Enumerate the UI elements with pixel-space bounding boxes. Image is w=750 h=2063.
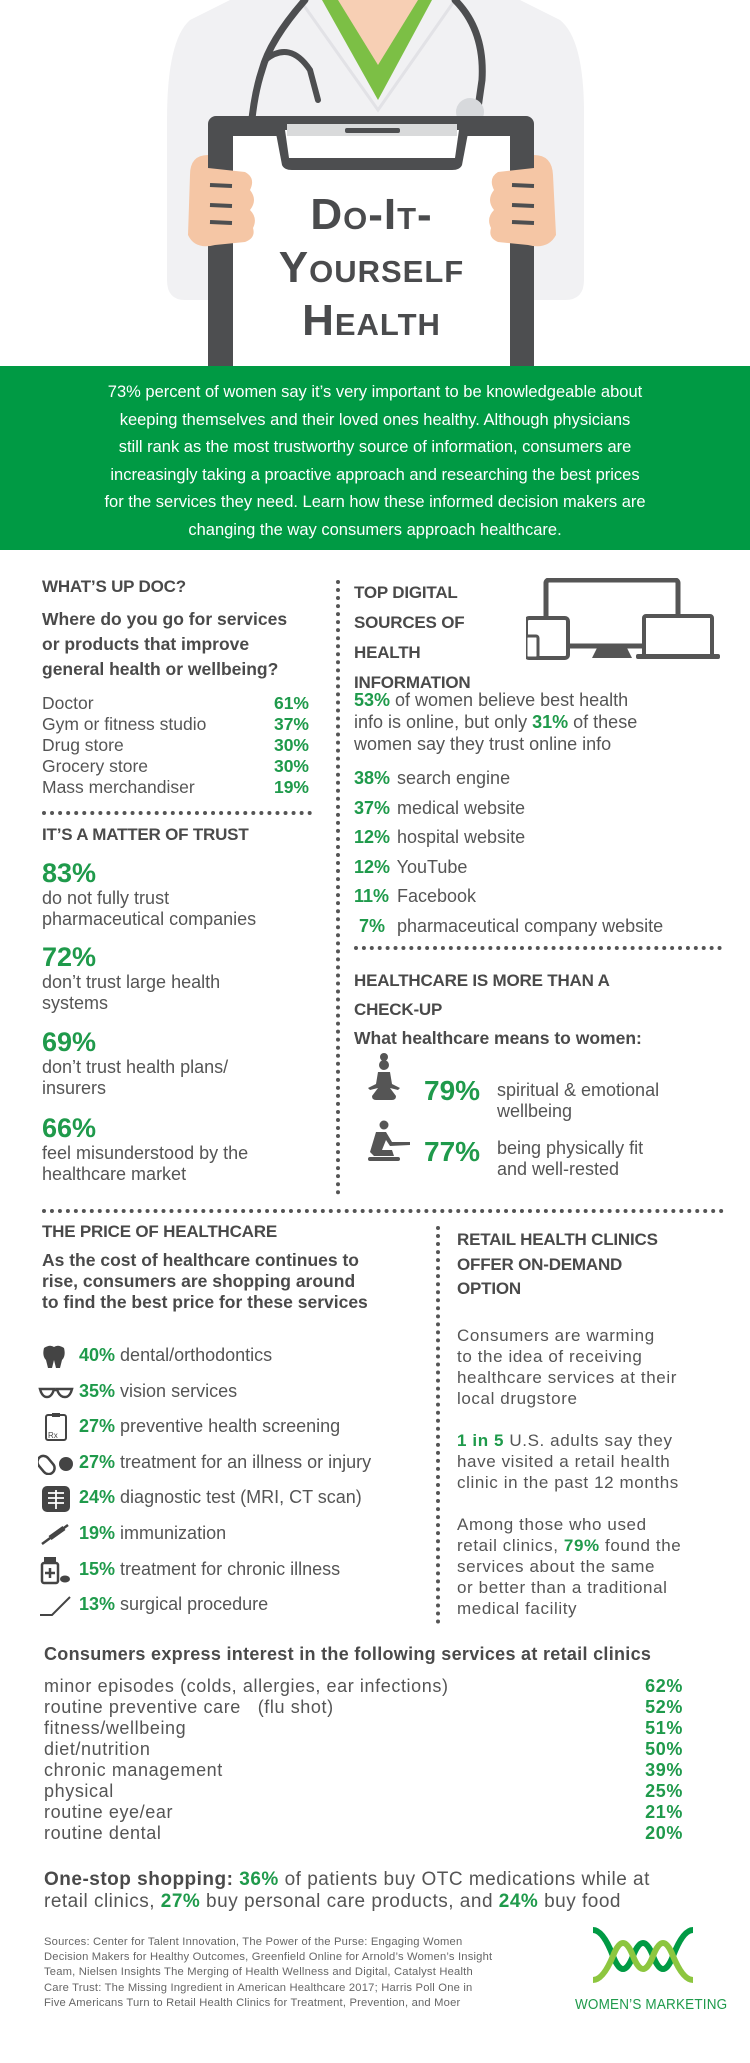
- list: 25%: [645, 1781, 683, 1801]
- heading: CHECK-UP: [354, 1000, 442, 1019]
- list: 30%: [274, 756, 309, 776]
- text block: Consumers are warming: [457, 1326, 655, 1345]
- heading: Consumers express interest in the following services at retail clinics: [44, 1644, 651, 1664]
- question: [42, 609, 287, 679]
- subheading: [42, 1250, 368, 1312]
- text block: to the idea of receiving: [457, 1347, 642, 1366]
- sources: Sources: Center for Talent Innovation, The Power of the Purse: Engaging Women: [44, 1936, 462, 1948]
- one-stop shopping callout: retail clinics, 27% buy personal care products, and 24% buy food: [44, 1891, 621, 1912]
- left hand: [188, 155, 255, 246]
- stat 69: 69%: [42, 1027, 96, 1057]
- heading: OPTION: [457, 1279, 521, 1298]
- list: 38%: [354, 768, 390, 788]
- list: 37%: [274, 714, 309, 734]
- stat 72: 72%: [42, 942, 96, 972]
- list: YouTube: [397, 856, 467, 876]
- title: [279, 190, 464, 345]
- stat paragraph: women say they trust online info: [354, 734, 611, 754]
- heading: IT’S A MATTER OF TRUST: [42, 825, 249, 844]
- section: price of healthcare: [38, 1222, 372, 1616]
- coat: [167, 0, 584, 300]
- list: minor episodes (colds, allergies, ear infections): [44, 1676, 449, 1696]
- stat 79: services about the same: [457, 1557, 655, 1576]
- list: pharmaceutical company website: [397, 916, 663, 936]
- list: routine eye/ear: [44, 1802, 173, 1822]
- list: Facebook: [397, 886, 476, 906]
- section: more than a check-up: spiritual & emotional: [497, 1080, 659, 1100]
- stat 1 in 5: [457, 1431, 679, 1492]
- heading: TOP DIGITAL: [354, 583, 458, 602]
- price list with icons: [38, 1345, 372, 1616]
- stat paragraph: info is online, but only 31% of these: [354, 712, 637, 732]
- section: interest in services: [44, 1644, 683, 1843]
- stethoscope: [250, 0, 305, 145]
- header illustration: doctor holding clipboard: [167, 0, 584, 366]
- intro green band: changing the way consumers approach healthcare.: [188, 520, 562, 538]
- stat 66: healthcare market: [42, 1164, 186, 1184]
- section: more than a check-up: [354, 971, 659, 1179]
- section: retail health clinics: [457, 1230, 681, 1618]
- stat paragraph: 53% of women believe best health: [354, 690, 628, 710]
- intro green band: keeping themselves and their loved ones healthy. Although physicians: [120, 410, 630, 428]
- list: [354, 768, 663, 936]
- one-stop shopping callout: [44, 1869, 650, 1912]
- stat 83: [42, 858, 256, 929]
- stat 69: [42, 1027, 228, 1098]
- question: Where do you go for services: [42, 609, 287, 629]
- list: 39%: [645, 1760, 683, 1780]
- list: medical website: [397, 798, 525, 818]
- price list with icons: 40% dental/orthodontics: [79, 1345, 272, 1365]
- list: routine preventive care (flu shot): [44, 1697, 334, 1717]
- question: general health or wellbeing?: [42, 659, 278, 679]
- list: Doctor: [42, 693, 94, 713]
- stat 79: or better than a traditional: [457, 1578, 668, 1597]
- text block: local drugstore: [457, 1389, 578, 1408]
- heading: SOURCES OF: [354, 613, 464, 632]
- title: Do-It-: [310, 190, 433, 239]
- stat 72: [42, 942, 220, 1013]
- subheading: As the cost of healthcare continues to: [42, 1250, 359, 1270]
- intro green band: for the services they need. Learn how these informed decision makers are: [104, 493, 646, 511]
- stat 69: don’t trust health plans/: [42, 1057, 228, 1077]
- list: 7%: [359, 916, 385, 936]
- heading: RETAIL HEALTH CLINICS: [457, 1230, 658, 1249]
- stat 83: pharmaceutical companies: [42, 909, 256, 929]
- list: hospital website: [397, 827, 525, 847]
- stat 66: 66%: [42, 1113, 96, 1143]
- intro green band: 73% percent of women say it’s very important to be knowledgeable about: [108, 383, 642, 401]
- heading: WHAT’S UP DOC?: [42, 577, 186, 596]
- stat 1 in 5: 1 in 5 U.S. adults say they: [457, 1431, 673, 1450]
- list: diet/nutrition: [44, 1739, 150, 1759]
- stat 66: feel misunderstood by the: [42, 1143, 248, 1163]
- list: 20%: [645, 1823, 683, 1843]
- list: search engine: [397, 768, 510, 788]
- list: [42, 693, 309, 797]
- stat paragraph: [354, 690, 637, 754]
- list: chronic management: [44, 1760, 223, 1780]
- list: routine dental: [44, 1823, 161, 1843]
- stat 1 in 5: clinic in the past 12 months: [457, 1473, 679, 1492]
- price list with icons: 24% diagnostic test (MRI, CT scan): [79, 1487, 362, 1507]
- list: 21%: [645, 1802, 683, 1822]
- sources: Decision Makers for Healthy Outcomes, Greenfield Online for Arnold’s Women’s Insight: [44, 1951, 492, 1963]
- section: what's up doc: [42, 577, 309, 797]
- stat 79: 79%: [424, 1075, 480, 1106]
- subheading: to find the best price for these services: [42, 1292, 368, 1312]
- logo: women's marketing: [575, 1927, 727, 2013]
- list: Grocery store: [42, 756, 148, 776]
- sources: [44, 1936, 492, 2009]
- section: more than a check-up: wellbeing: [497, 1101, 572, 1121]
- list: [44, 1676, 683, 1843]
- list: 11%: [354, 886, 389, 906]
- question: or products that improve: [42, 634, 249, 654]
- stat 72: don’t trust large health: [42, 972, 220, 992]
- title: Health: [302, 296, 441, 345]
- list: Drug store: [42, 735, 124, 755]
- one-stop shopping callout: One-stop shopping: 36% of patients buy OTC medications while at: [44, 1869, 650, 1890]
- price list with icons: 35% vision services: [79, 1381, 237, 1401]
- intro green band: increasingly taking a proactive approach and researching the best prices: [110, 466, 640, 484]
- clipboard board: [208, 116, 534, 396]
- icon: meditation: [368, 1053, 400, 1100]
- sources: Team, Nielsen Insights The Merging of Health Wellness and Digital, Catalyst Health: [44, 1966, 473, 1978]
- stat 79: Among those who used: [457, 1515, 647, 1534]
- list: Gym or fitness studio: [42, 714, 206, 734]
- stat 66: [42, 1113, 248, 1184]
- intro green band: [0, 366, 750, 550]
- price list with icons: 27% preventive health screening: [79, 1416, 340, 1436]
- heading: THE PRICE OF HEALTHCARE: [42, 1222, 277, 1241]
- list: 12%: [354, 856, 390, 876]
- heading: OFFER ON-DEMAND: [457, 1254, 622, 1274]
- price list with icons: Rx: [48, 1431, 58, 1440]
- right hand: [489, 155, 556, 246]
- sources: Five Americans Turn to Retail Health Clinics for Treatment, Prevention, and Moer: [44, 1997, 460, 2009]
- stat 1 in 5: have visited a retail health: [457, 1452, 670, 1471]
- sources: Care Trust: The Missing Ingredient in American Healthcare 2017; Harris Poll One in: [44, 1982, 472, 1994]
- list: 37%: [354, 798, 390, 818]
- logo: women's marketing: WOMEN’S MARKETING: [575, 1996, 727, 2013]
- icon: devices: [526, 578, 720, 660]
- text block: [457, 1326, 677, 1408]
- list: 50%: [645, 1739, 683, 1759]
- stat 69: insurers: [42, 1078, 106, 1098]
- stat 83: 83%: [42, 858, 96, 888]
- list: 12%: [354, 827, 390, 847]
- list: 51%: [645, 1718, 683, 1738]
- section: top digital sources: [354, 578, 720, 936]
- heading: HEALTHCARE IS MORE THAN A: [354, 971, 610, 990]
- stat 77: 77%: [424, 1136, 480, 1167]
- section: more than a check-up: and well-rested: [497, 1159, 619, 1179]
- stat 79: [457, 1515, 681, 1618]
- stat 72: systems: [42, 993, 108, 1013]
- stat 79: medical facility: [457, 1599, 577, 1618]
- price list with icons: 27% treatment for an illness or injury: [79, 1452, 371, 1472]
- price list with icons: 15% treatment for chronic illness: [79, 1559, 340, 1579]
- intro green band: still rank as the most trustworthy source of information, consumers are: [119, 438, 631, 456]
- heading: INFORMATION: [354, 673, 470, 692]
- title: Yourself: [279, 243, 464, 292]
- list: 61%: [274, 693, 309, 713]
- heading: [354, 971, 610, 1019]
- subheading: What healthcare means to women:: [354, 1028, 642, 1048]
- green scrubs V: [322, 0, 432, 100]
- stat 83: do not fully trust: [42, 888, 169, 908]
- text block: healthcare services at their: [457, 1368, 677, 1387]
- list: fitness/wellbeing: [44, 1718, 186, 1738]
- list: 52%: [645, 1697, 683, 1717]
- list: 62%: [645, 1676, 683, 1696]
- heading: [354, 583, 470, 692]
- list: 30%: [274, 735, 309, 755]
- icon: rowing: [368, 1120, 410, 1161]
- section: more than a check-up: being physically fit: [497, 1138, 643, 1158]
- section: matter of trust: [42, 825, 256, 1184]
- subheading: rise, consumers are shopping around: [42, 1271, 355, 1291]
- list: 19%: [274, 777, 309, 797]
- price list with icons: 19% immunization: [79, 1523, 226, 1543]
- list: physical: [44, 1781, 114, 1801]
- stat 79: retail clinics, 79% found the: [457, 1536, 681, 1555]
- list: Mass merchandiser: [42, 777, 195, 797]
- heading: [457, 1230, 658, 1298]
- price list with icons: 13% surgical procedure: [79, 1594, 268, 1614]
- heading: HEALTH: [354, 643, 420, 662]
